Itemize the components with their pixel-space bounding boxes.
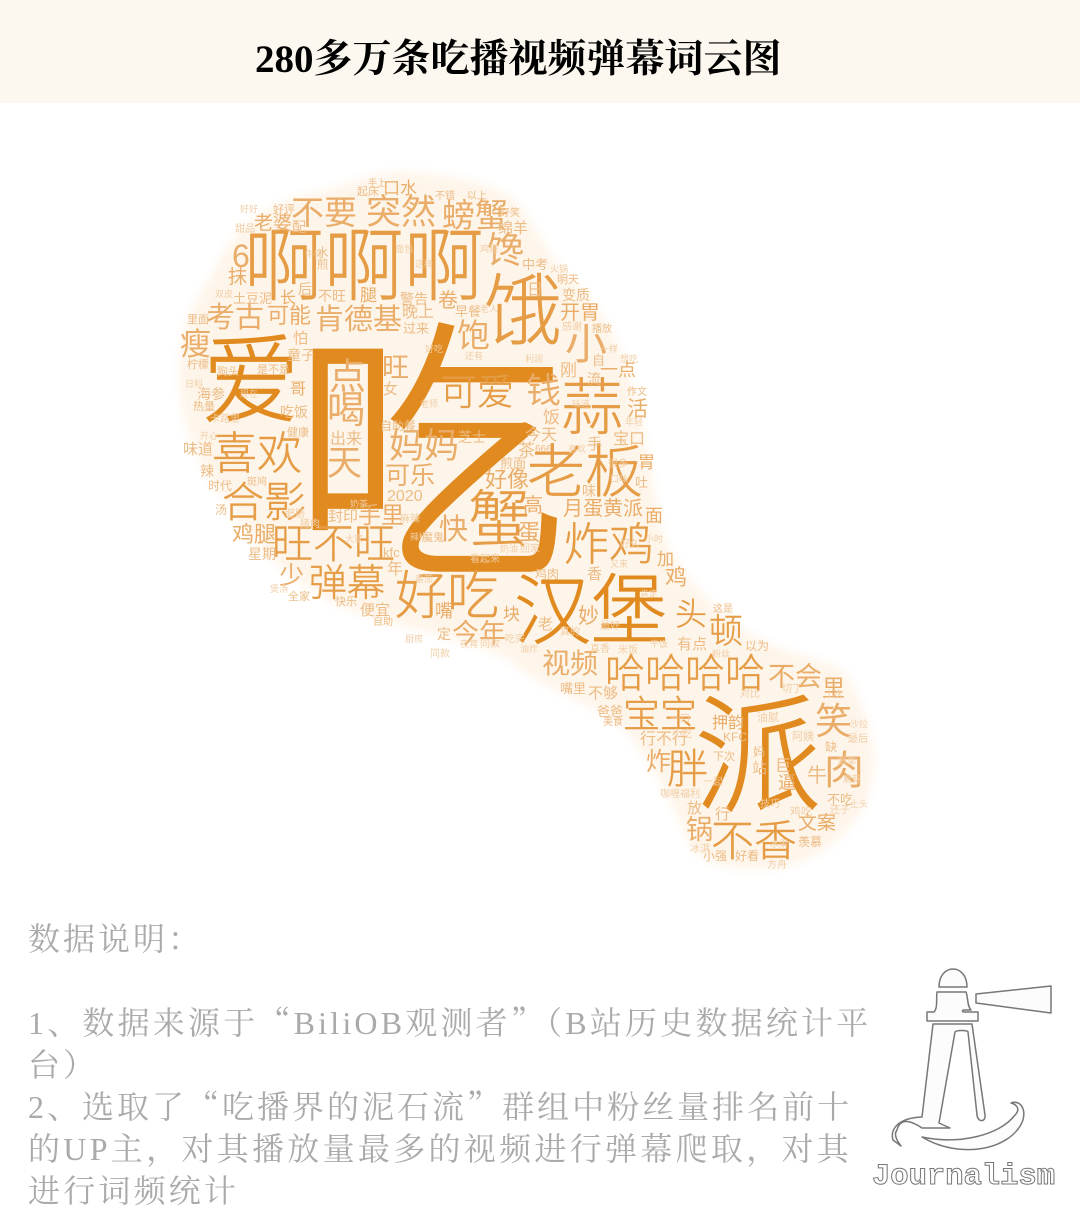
- word cloud: [180, 178, 868, 871]
- word cloud: 老人: [480, 304, 498, 314]
- word cloud: 抹: [228, 267, 247, 288]
- word cloud: 咖喱: [660, 789, 680, 800]
- word cloud: 技巧: [760, 799, 780, 810]
- word cloud: 吐: [635, 475, 648, 490]
- word cloud: 鸡肉: [535, 567, 559, 581]
- word cloud: 对比: [740, 689, 760, 700]
- word cloud: 星期: [248, 546, 276, 562]
- word cloud: 同款: [430, 649, 450, 660]
- word: 胖: 胖: [667, 746, 708, 792]
- word: 突然: 突然: [366, 193, 436, 232]
- word cloud: 一点: [600, 360, 636, 380]
- word: 头: 头: [675, 596, 707, 632]
- word: 顿: 顿: [709, 613, 743, 651]
- word cloud: 老师: [420, 399, 438, 409]
- word cloud: 时代: [208, 479, 232, 493]
- word cloud: 油腻: [757, 712, 779, 724]
- word cloud: 利润: [525, 354, 543, 364]
- word: 好像: 好像: [485, 467, 529, 492]
- word cloud: 牛: [807, 765, 827, 787]
- word cloud: 2020: [387, 488, 423, 505]
- word cloud: 吃完: [505, 634, 525, 645]
- word cloud: 自助: [373, 617, 393, 628]
- word: 喜欢: 喜欢: [212, 428, 302, 479]
- word cloud: 日料: [185, 379, 203, 389]
- word cloud: 阿姨: [792, 731, 814, 743]
- word cloud: 同款: [480, 639, 500, 650]
- word cloud: 喜欢: [568, 444, 586, 454]
- word cloud: 魔鬼: [422, 532, 444, 544]
- word cloud: 蛋: [518, 520, 540, 545]
- note 2 end: 进行词频统计: [28, 1173, 239, 1208]
- word cloud: 下次: [713, 751, 735, 763]
- word cloud: 面包: [395, 244, 413, 254]
- word cloud: 土豆泥: [233, 291, 272, 306]
- word cloud: 便宜: [360, 602, 390, 619]
- word cloud: 一起: [703, 777, 723, 788]
- word cloud: 大家: [345, 534, 363, 544]
- word: 可乐: 可乐: [385, 462, 435, 490]
- word cloud: 饭: [543, 408, 560, 427]
- word cloud: 这是: [713, 604, 733, 615]
- small words: [183, 178, 868, 871]
- word: 派: 派: [694, 686, 822, 829]
- word cloud: 今天: [525, 427, 557, 444]
- word cloud: 热量: [193, 401, 215, 413]
- word: 螃蟹: 螃蟹: [442, 197, 508, 234]
- word cloud: 长: [280, 290, 296, 307]
- word cloud: 押韵: [712, 715, 744, 732]
- word cloud: 辣椒: [410, 532, 428, 542]
- word: 肯德基: 肯德基: [315, 304, 402, 336]
- word cloud: 方舟: [767, 860, 787, 871]
- word cloud: 怕: [293, 330, 308, 347]
- word cloud: 茶: [518, 441, 535, 460]
- word cloud: 吃饭: [280, 404, 308, 420]
- word cloud background shape: chicken drumstick: [178, 171, 875, 870]
- word cloud: 加: [657, 550, 674, 569]
- word cloud: 鸡: [665, 565, 687, 590]
- word cloud: 高: [523, 495, 543, 517]
- note 2: 2、选取了“吃播界的泥石流”群组中粉丝量排名前十: [28, 1082, 852, 1128]
- word cloud: 蘑菇: [843, 774, 861, 784]
- word cloud: 香: [587, 566, 602, 583]
- word cloud: 斑鸠: [247, 477, 267, 488]
- word cloud: 一样: [600, 344, 618, 354]
- word cloud: 上次: [825, 689, 843, 699]
- word cloud: 老: [538, 616, 553, 633]
- word cloud: 味: [582, 483, 596, 499]
- word cloud: 好吃: [425, 344, 443, 354]
- word cloud: 行: [715, 806, 730, 823]
- word cloud: 真的: [560, 627, 580, 638]
- word cloud: 油炸: [520, 644, 538, 654]
- word cloud: 过来: [403, 321, 429, 336]
- word: 数字 6: 6: [232, 238, 250, 274]
- word cloud: 面: [645, 506, 663, 526]
- word cloud: 鸡腿: [232, 522, 276, 547]
- word cloud: 真香: [590, 644, 610, 655]
- word cloud: 水煎: [315, 246, 329, 270]
- word cloud: 日: [527, 282, 543, 299]
- word cloud: 福利: [680, 789, 700, 800]
- word cloud: 很多: [608, 459, 628, 470]
- word cloud: kfc: [383, 545, 400, 560]
- word cloud: 煎面: [500, 456, 526, 471]
- word: 好吃: 好吃: [395, 568, 499, 626]
- word cloud: 有点: [677, 636, 707, 653]
- word: 爱: 爱: [202, 326, 300, 436]
- word: 旺: 旺: [382, 353, 409, 383]
- word cloud: 干饭: [650, 639, 668, 649]
- word cloud: 播放: [592, 324, 612, 335]
- word cloud: 不吃: [827, 792, 853, 807]
- word cloud: 好笑: [500, 208, 520, 219]
- word cloud: 好看: [735, 849, 759, 863]
- word cloud: 好评: [273, 204, 295, 216]
- word cloud: 芝士: [458, 429, 486, 445]
- word cloud: 番茄: [415, 574, 433, 584]
- word: 今年: 今年: [452, 619, 506, 649]
- note 1 continued: 台）: [28, 1047, 98, 1083]
- word cloud: 奶油: [500, 544, 518, 554]
- word cloud: 里面: [187, 314, 209, 326]
- word cloud: 快乐: [335, 596, 357, 608]
- word cloud: 水果: [770, 839, 788, 849]
- word cloud: 还子: [830, 805, 850, 816]
- word: 文案: 文案: [798, 813, 836, 834]
- word cloud: 活: [627, 398, 648, 421]
- word: 钱: 钱: [526, 372, 561, 411]
- word cloud: 以上: [467, 191, 487, 202]
- word cloud: 又来: [610, 559, 628, 569]
- word cloud: 刚: [560, 361, 577, 380]
- word: 天: 天: [327, 444, 362, 483]
- word cloud: 明天: [557, 274, 579, 286]
- word cloud: 老婆: [254, 213, 292, 234]
- word cloud: 晚上: [402, 304, 434, 321]
- word cloud: 巨: [775, 758, 791, 775]
- word cloud: 年: [387, 561, 403, 578]
- word cloud: 双皮: [215, 289, 233, 299]
- word cloud: 小时: [645, 534, 663, 544]
- word cloud: 想吃: [620, 354, 638, 364]
- word: 旺不旺: 旺不旺: [272, 521, 395, 567]
- word cloud: 海参: [197, 386, 225, 402]
- word cloud: 作文: [627, 387, 647, 398]
- word: 少: 少: [279, 562, 304, 590]
- word cloud: 自助餐: [380, 419, 416, 433]
- word cloud: 羡慕: [798, 835, 822, 849]
- word cloud: 沙拉: [850, 719, 868, 729]
- word: 点: 点: [329, 356, 366, 397]
- word: 不要: 不要: [291, 194, 357, 231]
- word cloud: 看起来: [470, 554, 500, 565]
- word cloud: 警告: [400, 291, 428, 307]
- word cloud: 汤: [215, 503, 227, 517]
- word cloud: 站: [752, 760, 767, 777]
- word cloud: 感谢: [562, 322, 582, 333]
- word: 可能: 可能: [267, 303, 311, 328]
- word cloud: 以为: [745, 639, 769, 653]
- word cloud: 卷: [438, 290, 458, 312]
- word cloud: 女: [383, 381, 398, 398]
- word: 考古: 考古: [206, 302, 264, 334]
- word: 馋: 馋: [487, 230, 524, 271]
- logo wordmark: Journalism: [872, 1160, 1055, 1194]
- note 2 continued: 的UP主，对其播放量最多的视频进行弹幕爬取，对其: [28, 1131, 852, 1167]
- word cloud: 鸡吃: [790, 806, 812, 818]
- word cloud: 最后: [848, 734, 868, 745]
- word cloud: 自: [592, 353, 605, 368]
- word cloud: 不旺: [318, 288, 346, 304]
- word: 老板: 老板: [527, 440, 643, 505]
- word cloud: 绵羊: [498, 220, 528, 237]
- word: 月蛋黄派: 月蛋黄派: [563, 498, 643, 520]
- word: 不会: 不会: [768, 662, 822, 692]
- word cloud: 切丁: [782, 684, 802, 695]
- word cloud: 卡路里: [210, 414, 240, 425]
- word cloud: 嘴里: [560, 681, 586, 696]
- word cloud: 蔬菜: [838, 756, 856, 766]
- word: 喝: 喝: [327, 390, 365, 432]
- word cloud: 冰淇: [690, 844, 710, 855]
- title: 280多万条吃播视频弹幕词云图: [255, 38, 782, 81]
- word cloud: 嘴: [435, 601, 453, 621]
- word: 锅: 锅: [686, 815, 713, 845]
- word cloud: 行不行: [640, 731, 688, 748]
- word: 啊啊啊: 啊啊啊: [244, 222, 484, 311]
- word: 里: 里: [822, 675, 845, 701]
- word: 炸鸡: 炸鸡: [564, 519, 654, 570]
- word: 快: 快: [439, 514, 468, 546]
- word cloud: 奶茶: [350, 499, 368, 509]
- word: 炸: 炸: [646, 748, 671, 776]
- word cloud: 逼: [778, 773, 796, 793]
- word cloud: 夜宵: [460, 639, 478, 649]
- icon: lighthouse Journalism logo: [872, 968, 1055, 1194]
- word: 笑: 笑: [815, 701, 852, 742]
- word cloud: 爸爸: [597, 704, 623, 719]
- word cloud: 一口: [670, 714, 690, 725]
- title banner: [0, 0, 1080, 103]
- word cloud: 牛排: [305, 249, 323, 259]
- word cloud: 封印: [328, 508, 358, 525]
- word cloud: 配: [292, 219, 306, 235]
- word cloud: 好久: [620, 539, 640, 550]
- word cloud: 麻辣: [400, 514, 420, 525]
- word: 妈妈: 妈妈: [389, 427, 459, 466]
- word cloud: 口味: [610, 474, 628, 484]
- word cloud: 手: [587, 436, 602, 453]
- word: 手里: 手里: [358, 502, 404, 528]
- word: 小: 小: [565, 321, 607, 368]
- word cloud: 辣: [200, 463, 214, 479]
- word: 蟹: 蟹: [468, 486, 530, 555]
- word cloud: 妙: [578, 605, 599, 628]
- word cloud: 宝口: [613, 431, 645, 448]
- word cloud: 出来: [330, 431, 362, 448]
- word cloud: 年轻: [625, 417, 643, 427]
- word: 可爱: 可爱: [440, 372, 514, 413]
- word: 汉堡: 汉堡: [514, 569, 668, 655]
- word cloud: 后: [298, 281, 312, 297]
- word cloud: 甜品: [235, 224, 255, 235]
- word cloud: 块: [503, 605, 520, 624]
- word: 视频: 视频: [542, 648, 598, 679]
- word: 饱: 饱: [457, 317, 490, 354]
- word cloud: 缺: [825, 740, 837, 754]
- word cloud: 好好: [240, 204, 258, 214]
- word: 吃: 吃: [291, 305, 567, 613]
- word cloud: 变质: [562, 287, 590, 303]
- word cloud: KFC: [723, 730, 747, 744]
- word: 合影: 合影: [222, 479, 306, 526]
- data notes text block: [28, 921, 871, 1208]
- word cloud: 不够: [588, 685, 618, 702]
- word cloud: 这样: [415, 259, 433, 269]
- word cloud: 定: [437, 626, 451, 642]
- word: 瘦: 瘦: [180, 327, 211, 362]
- note 1: 1、数据来源于“BiliOB观测者”（B站历史数据统计平: [28, 998, 871, 1044]
- word: 蒜: 蒜: [561, 374, 623, 443]
- word cloud: 鸡翅: [480, 244, 498, 254]
- word cloud: 还有: [465, 351, 483, 361]
- word cloud: 全家: [288, 591, 310, 603]
- word: 弹幕: 弹幕: [309, 563, 385, 605]
- word cloud: 现在: [240, 389, 258, 399]
- word cloud: 小吃: [672, 729, 692, 740]
- word: 饿: 饿: [484, 267, 562, 355]
- word cloud: 最好: [600, 621, 620, 632]
- word cloud: 腿: [360, 286, 377, 305]
- word cloud: 不错: [435, 191, 455, 202]
- word cloud: 味道: [572, 399, 590, 409]
- word cloud: 早餐: [455, 304, 481, 319]
- word cloud: 味道: [183, 441, 213, 458]
- word cloud: 肥肠: [285, 509, 305, 520]
- word cloud: 小强: [703, 849, 727, 863]
- word cloud: 手上: [368, 178, 386, 188]
- word cloud: 放: [687, 800, 702, 817]
- word cloud: 粉丝: [712, 649, 730, 659]
- word cloud: 胃: [638, 453, 655, 472]
- word cloud: 开胃: [560, 302, 600, 324]
- word cloud: 猪肉: [300, 519, 320, 530]
- word cloud: 美食: [603, 717, 623, 728]
- word cloud: 米饭: [618, 645, 638, 656]
- word cloud: 哥: [290, 381, 306, 398]
- word cloud: 狗头: [217, 366, 239, 378]
- word cloud: 开心: [200, 431, 218, 441]
- word: 宝宝: 宝宝: [623, 694, 697, 735]
- word cloud: 健康: [287, 427, 309, 439]
- word cloud: 上头: [850, 799, 868, 809]
- heading: 数据说明: 数据说明：: [28, 921, 203, 957]
- word cloud: 是不是: [257, 364, 290, 376]
- word cloud: 厨房: [405, 634, 423, 644]
- word cloud: 666: [535, 444, 552, 455]
- word cloud: 回家: [520, 544, 540, 555]
- word cloud: 煲汤: [270, 584, 288, 594]
- word: 哈哈哈哈: 哈哈哈哈: [605, 652, 765, 696]
- word: 不香: 不香: [711, 818, 797, 866]
- word cloud: 肯定: [640, 589, 658, 599]
- word cloud: 妈: [753, 745, 765, 759]
- word cloud: 起床: [357, 186, 379, 198]
- word cloud: 流: [587, 371, 601, 387]
- word cloud: 口水: [383, 179, 417, 198]
- word cloud: 中考: [522, 257, 548, 272]
- word cloud: 柠檬: [187, 359, 209, 371]
- word cloud: 火锅: [550, 264, 568, 274]
- word: 肉: 肉: [824, 749, 864, 793]
- word cloud: 童子: [287, 347, 315, 363]
